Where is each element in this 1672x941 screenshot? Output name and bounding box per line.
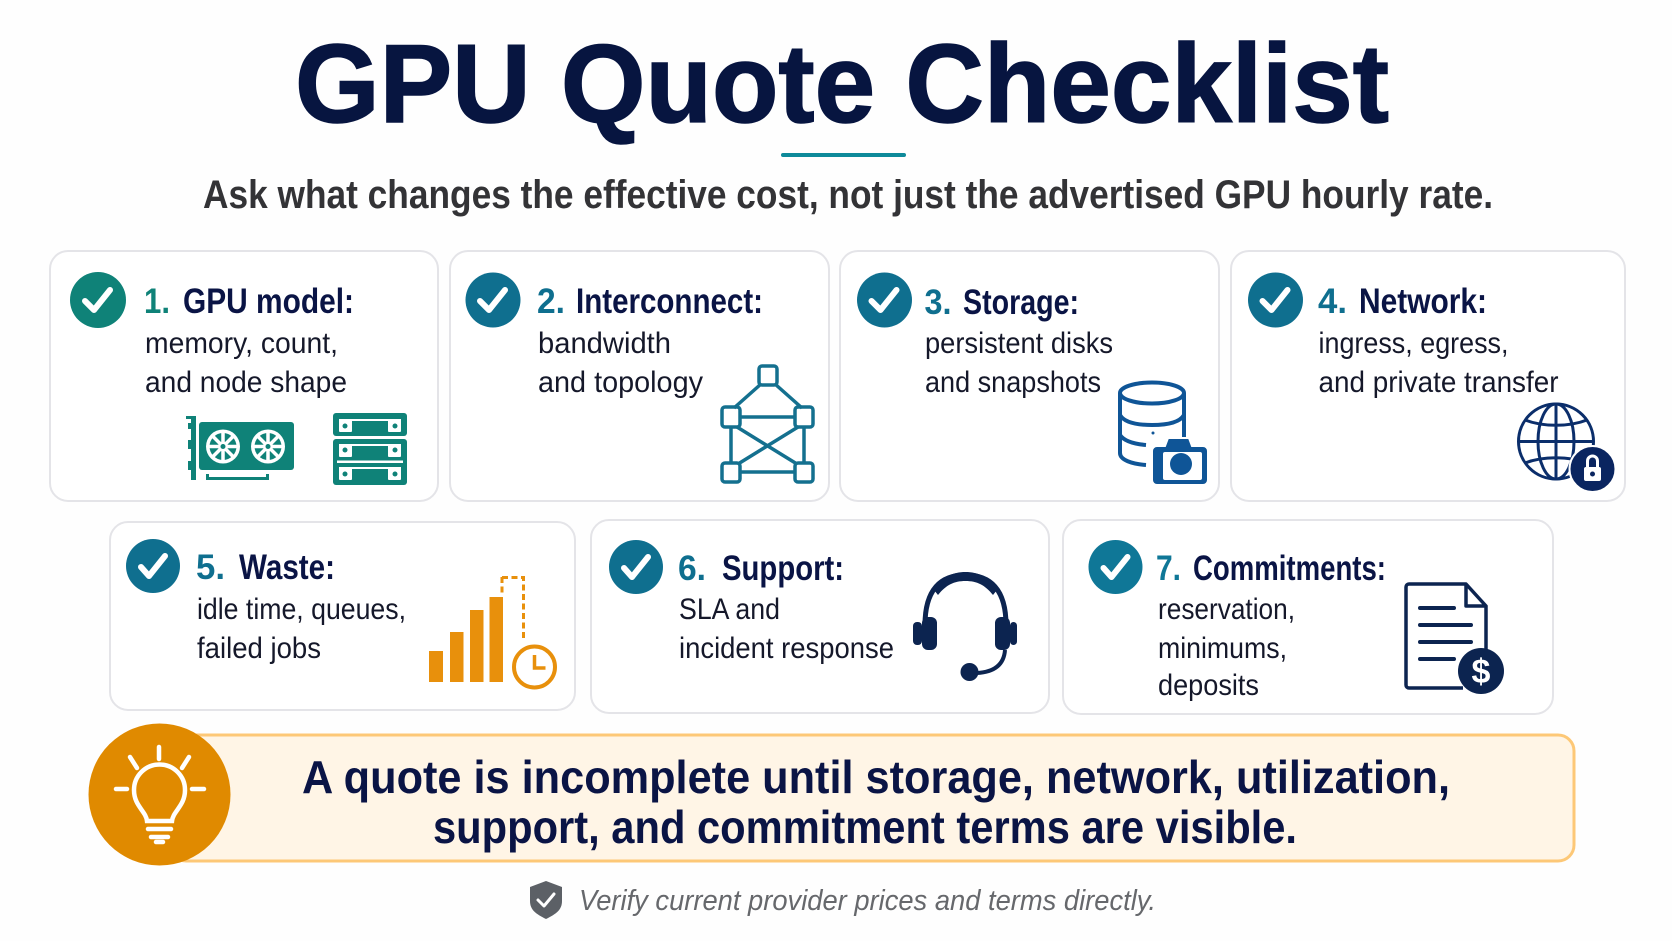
check badge xyxy=(1088,540,1142,594)
heading: Interconnect: xyxy=(576,282,763,321)
heading: Support: xyxy=(722,549,844,588)
heading: 4. xyxy=(1318,282,1347,321)
check badge xyxy=(70,272,126,328)
body text: failed jobs xyxy=(197,632,321,665)
heading xyxy=(1318,282,1487,321)
body text xyxy=(145,327,347,399)
body text: memory, count, xyxy=(145,327,338,360)
icon: GPU card xyxy=(186,416,294,480)
heading xyxy=(1156,549,1386,588)
icon: database with camera xyxy=(1120,382,1208,485)
heading xyxy=(678,549,844,588)
body text xyxy=(197,593,406,665)
heading: 7. xyxy=(1156,549,1181,588)
check badge xyxy=(1248,272,1303,328)
panel: Interconnect xyxy=(450,251,829,501)
body text xyxy=(538,327,703,399)
callout text xyxy=(302,751,1450,853)
icon: shield xyxy=(530,881,562,919)
footnote xyxy=(530,881,1156,919)
heading: Commitments: xyxy=(1193,549,1386,588)
icon: lightbulb xyxy=(88,724,230,866)
panel: Network xyxy=(1231,251,1625,501)
heading: 1. xyxy=(144,282,170,321)
body text: and private transfer xyxy=(1318,366,1559,399)
heading: Storage: xyxy=(963,283,1079,322)
icon: server rack xyxy=(333,413,407,485)
body text: ingress, egress, xyxy=(1318,327,1508,360)
panel: Waste xyxy=(110,522,575,710)
heading xyxy=(924,283,1079,322)
subtitle: Ask what changes the effective cost, not just the advertised GPU hourly rate. xyxy=(203,173,1493,217)
body text: incident response xyxy=(679,632,894,665)
body text: deposits xyxy=(1158,669,1259,702)
heading: 5. xyxy=(196,548,225,587)
panel: GPU model xyxy=(50,251,438,501)
callout text: A quote is incomplete until storage, network, utilization, xyxy=(302,751,1450,803)
body text: idle time, queues, xyxy=(197,593,406,626)
icon: headset xyxy=(913,572,1017,681)
body text: SLA and xyxy=(679,593,780,626)
body text xyxy=(1158,593,1295,702)
body text xyxy=(1318,327,1559,399)
callout text: support, and commitment terms are visible. xyxy=(433,801,1297,853)
body text: bandwidth xyxy=(538,327,671,360)
check badge xyxy=(126,539,180,593)
title: GPU Quote Checklist xyxy=(295,22,1389,146)
icon: globe with lock xyxy=(1518,404,1616,492)
heading: GPU model: xyxy=(183,282,354,321)
body text: minimums, xyxy=(1158,632,1287,665)
panel: Storage xyxy=(840,251,1219,501)
footnote text: Verify current provider prices and terms directly. xyxy=(579,885,1156,917)
body text xyxy=(925,327,1113,399)
body text: reservation, xyxy=(1158,593,1295,626)
callout banner xyxy=(170,735,1574,861)
panel: Commitments xyxy=(1063,520,1553,714)
heading: 2. xyxy=(537,282,565,321)
body text xyxy=(679,593,894,665)
icon: bars with clock xyxy=(429,577,555,688)
check badge xyxy=(609,540,663,594)
heading: Waste: xyxy=(239,548,335,587)
check badge xyxy=(466,272,520,328)
panel: Support xyxy=(591,520,1049,713)
heading: Network: xyxy=(1359,282,1487,321)
icon: network topology xyxy=(722,366,813,482)
heading: 6. xyxy=(678,549,706,588)
icon: document with dollar xyxy=(1406,584,1504,694)
body text: and snapshots xyxy=(925,366,1101,399)
heading: 3. xyxy=(924,283,952,322)
body text: and node shape xyxy=(145,366,347,399)
heading xyxy=(196,548,335,587)
check badge xyxy=(857,272,912,328)
icon: document with dollar: $ xyxy=(1472,653,1491,691)
body text: and topology xyxy=(538,366,703,399)
body text: persistent disks xyxy=(925,327,1113,360)
